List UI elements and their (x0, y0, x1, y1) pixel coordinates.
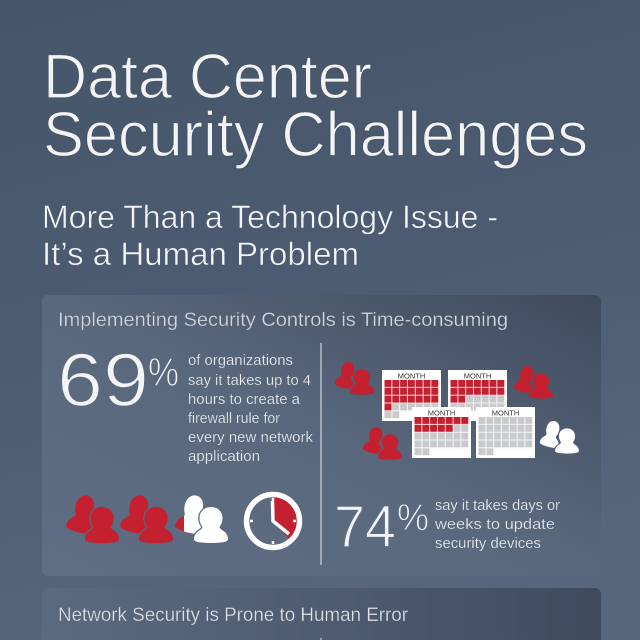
calendar: fourth month (476, 407, 535, 458)
icon: people pair, white (539, 419, 579, 454)
icon: people pair, red left (334, 360, 374, 395)
statistic: 74% (334, 494, 429, 560)
title: Data Center (43, 42, 372, 112)
text: 69% description: say it takes up to 4 (188, 373, 311, 389)
panel heading: Network Security is Prone to Human Error (58, 605, 409, 626)
icon: people group, red (65, 492, 119, 543)
panel: implementing security controls (42, 295, 601, 576)
statistic: 74%: 74 (334, 494, 396, 560)
calendar: first month (382, 370, 441, 421)
text: 69% description: every new network (188, 430, 314, 446)
icon: people pair, red lower (362, 425, 402, 460)
text: 74% description: say it takes days or (435, 498, 560, 514)
calendar: first month: MONTH (398, 372, 425, 380)
panel: network security human error (42, 588, 601, 640)
calendar: second month: MONTH (464, 372, 491, 380)
statistic: 74%: % (397, 497, 429, 539)
icon: people pair, red right (513, 364, 553, 399)
icon: clock (246, 494, 300, 548)
text: 74% description: security devices (435, 536, 541, 552)
statistic: 69% (57, 338, 179, 422)
title: Security Challenges (43, 100, 588, 170)
text: 74% description (434, 498, 560, 552)
icon: people group, red (119, 492, 173, 543)
text: 69% description (188, 353, 314, 465)
text: 69% description: of organizations (188, 353, 293, 369)
subtitle: It’s a Human Problem (42, 236, 359, 272)
statistic: 69%: 69 (57, 338, 149, 422)
calendar: second month (448, 370, 507, 421)
text: 69% description: firewall rule for (188, 411, 280, 427)
text: 69% description: application (188, 449, 260, 465)
subtitle (42, 199, 498, 272)
text: 74% description: weeks to update (434, 517, 555, 533)
subtitle: More Than a Technology Issue - (42, 199, 498, 235)
divider (320, 638, 322, 640)
icon: people group, part red part white (174, 492, 228, 543)
statistic: 69%: % (148, 351, 179, 395)
calendar: fourth month: MONTH (492, 408, 519, 418)
panel heading: Implementing Security Controls is Time-consuming (58, 310, 508, 331)
calendar: third month (412, 407, 471, 458)
divider (320, 343, 322, 565)
title (43, 42, 588, 170)
calendar: third month: MONTH (428, 408, 455, 418)
text: 69% description: hours to create a (188, 392, 301, 408)
